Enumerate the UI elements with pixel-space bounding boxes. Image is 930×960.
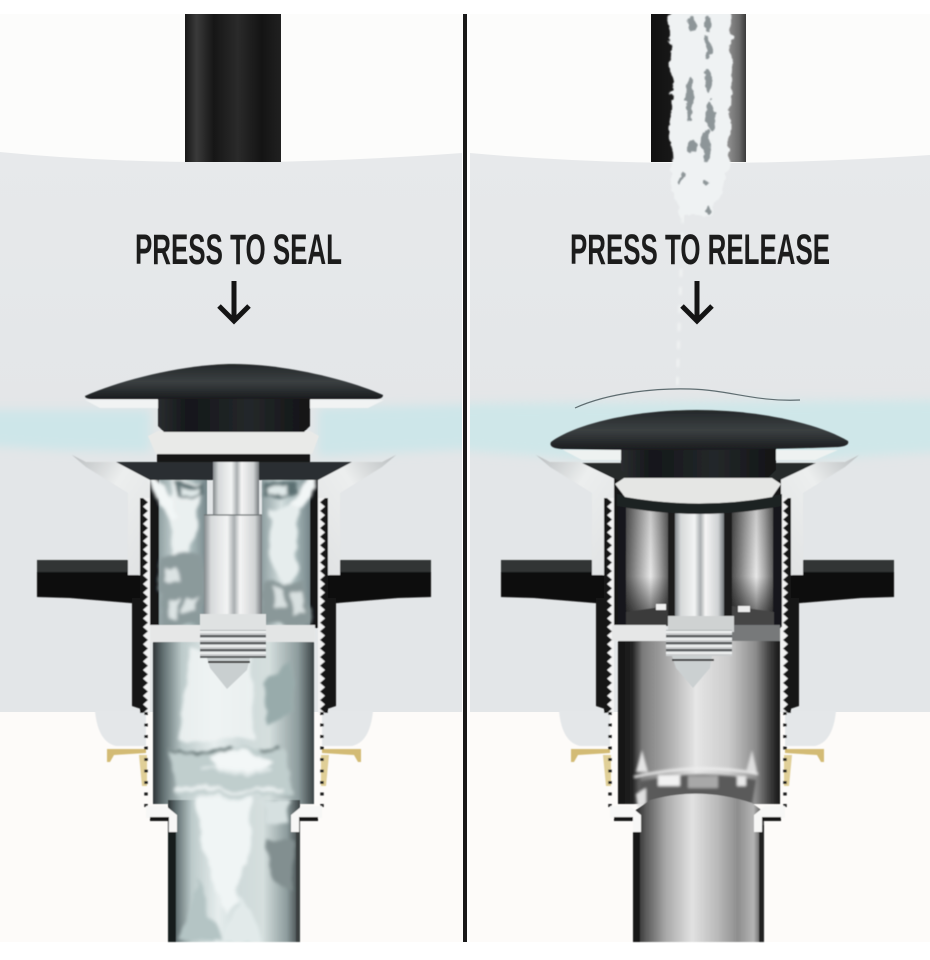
divider [463,14,467,942]
white seal [615,478,781,504]
steel chamber left [618,495,669,627]
white lip right [775,450,838,460]
faucet pipe [651,14,746,162]
right housing half [772,455,894,815]
left housing half [37,455,159,815]
chrome stem [666,510,734,688]
dark flange [116,462,352,480]
upper background [470,14,930,164]
upper background [0,14,462,164]
sink basin [470,153,930,712]
lower background [470,712,930,942]
steel chamber right [732,495,782,627]
lower pipe with water [168,798,300,942]
dark stem sleeve [668,506,732,622]
pipe outline right [759,825,764,942]
dark flange [582,463,816,480]
plug stem [158,398,310,432]
chamber top ring [617,494,782,514]
horizontal web right [732,625,780,641]
drain assembly [37,364,431,942]
panel: press to seal [0,14,500,942]
drain assembly [501,410,894,942]
lower background [0,712,462,942]
lower steel pipe [633,794,764,942]
water surface ripple [575,389,800,408]
black ring [157,453,310,462]
white seal [148,431,319,454]
panel: press to release [430,6,930,942]
right step collar [754,806,785,832]
plug cap [550,410,848,450]
pipe outline left [633,825,640,942]
heading: press to seal: PRESS TO SEAL [135,226,342,274]
horizontal web right [263,625,315,642]
left housing half [501,455,623,815]
white lip left [563,450,622,460]
water band [0,404,500,456]
lower body with water [153,640,314,804]
chrome stem [200,461,266,689]
sink basin [0,152,462,712]
horizontal web left [150,625,202,642]
right step collar [291,806,322,832]
water band [430,400,930,458]
left step collar [146,806,177,832]
white lip right [310,400,384,408]
water filled chamber right [262,472,318,626]
horizontal web left [612,625,666,641]
left step collar [610,806,641,832]
faucet pipe [185,14,281,162]
white lip left [85,400,158,408]
plug stem [621,447,776,478]
right housing half [309,455,431,815]
arrow: press down [219,281,249,321]
lower steel body [618,640,780,808]
plug cap [85,364,383,399]
water filled chamber left [150,472,207,626]
arrow: press down [682,281,712,321]
water stream [668,6,732,390]
